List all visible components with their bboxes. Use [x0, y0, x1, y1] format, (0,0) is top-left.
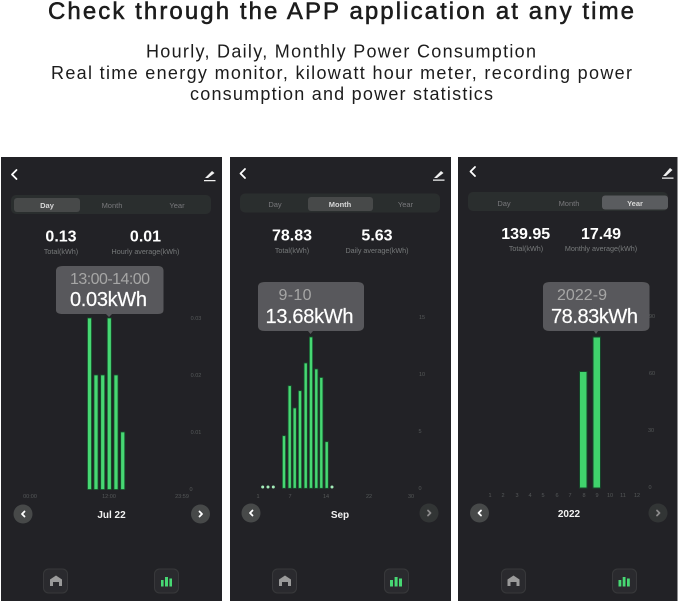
subtitle text [51, 42, 632, 104]
tab bar [468, 192, 668, 211]
stat: daily average [345, 228, 409, 255]
bar chart: hourly [88, 318, 125, 490]
icon: statistics button [384, 569, 408, 593]
x axis labels: 5 [541, 493, 545, 499]
stat: total [44, 228, 78, 256]
tooltip: 13.68kWh [266, 306, 354, 328]
stat: monthly average [565, 226, 637, 253]
y axis labels: 90 [649, 314, 655, 320]
stat: total: Total(kWh) [44, 247, 78, 256]
x axis labels [488, 493, 640, 499]
date navigator: Sep [331, 510, 349, 521]
icon: home button [272, 569, 296, 593]
tab bar: Month [559, 199, 579, 208]
tab bar [11, 195, 211, 214]
icon: edit pencil [662, 168, 674, 179]
date navigator [470, 504, 668, 522]
x axis labels: 3 [515, 493, 519, 499]
tab bar: Day [40, 201, 55, 210]
date navigator: Jul 22 [97, 510, 126, 521]
tooltip [258, 282, 364, 334]
stat: total: 0.13 [45, 228, 77, 246]
y axis labels: 0 [418, 486, 422, 492]
tab bar [240, 194, 440, 212]
x axis labels: 2 [501, 493, 505, 499]
stat: hourly average [112, 228, 179, 256]
stat: monthly average: Monthly average(kWh) [565, 244, 637, 253]
stat: hourly average: 0.01 [130, 228, 161, 246]
stat: total: 78.83 [272, 228, 312, 244]
tab bar: Year [627, 199, 643, 208]
y axis labels [418, 315, 425, 492]
stat: hourly average: Hourly average(kWh) [112, 247, 179, 256]
x axis labels: 7 [288, 494, 292, 500]
x axis labels: 23:59 [175, 494, 189, 500]
y axis labels: 60 [649, 371, 655, 377]
icon: back chevron [12, 170, 16, 179]
tooltip: 2022-9 [557, 287, 607, 304]
tooltip [56, 266, 164, 317]
x axis labels: 12:00 [102, 494, 116, 500]
tooltip: 9-10 [278, 287, 312, 304]
x axis labels: 7 [568, 493, 572, 499]
icon: edit pencil [204, 171, 216, 181]
x axis labels [256, 494, 414, 500]
panel: month view [230, 157, 451, 601]
bar chart: monthly [580, 337, 600, 488]
y axis labels: 0 [189, 487, 193, 493]
tab bar: Year [169, 201, 185, 210]
panel: year view [458, 157, 678, 601]
x axis labels: 12 [634, 493, 640, 499]
y axis labels: 5 [418, 429, 422, 435]
panel: day view [1, 157, 222, 601]
x axis labels: 22 [366, 494, 372, 500]
stat: daily average: 5.63 [361, 228, 393, 244]
y axis labels: 10 [419, 372, 425, 378]
y axis labels: 15 [419, 315, 425, 321]
y axis labels: 0 [648, 485, 652, 491]
x axis labels: 9 [595, 493, 599, 499]
x axis labels: 00:00 [23, 494, 37, 500]
x axis labels: 1 [256, 494, 260, 500]
x axis labels: 6 [555, 493, 559, 499]
x axis labels: 11 [620, 493, 626, 499]
x axis labels: 14 [323, 494, 329, 500]
x axis labels: 4 [528, 493, 532, 499]
stat: total: 139.95 [501, 226, 550, 243]
icon: statistics button [154, 569, 178, 593]
x axis labels: 1 [488, 493, 492, 499]
icon: edit pencil [433, 171, 444, 181]
stat: total [501, 226, 550, 253]
x axis labels: 8 [582, 493, 586, 499]
tooltip: 13:00-14:00 [70, 271, 150, 288]
x axis labels [23, 494, 189, 500]
tab bar: Month [329, 200, 352, 209]
bar chart: daily [261, 337, 334, 488]
y axis labels [648, 314, 655, 491]
x axis labels: 10 [607, 493, 613, 499]
tooltip [543, 282, 650, 334]
icon: home button [502, 569, 526, 593]
y axis labels: 30 [648, 428, 654, 434]
y axis labels [189, 316, 201, 493]
stat: total: Total(kWh) [275, 246, 309, 255]
subtitle text: Hourly, Daily, Monthly Power Consumption [146, 42, 536, 62]
stat: total [272, 228, 312, 255]
icon: home button [44, 569, 68, 593]
stat: daily average: Daily average(kWh) [345, 246, 409, 255]
date navigator [14, 504, 210, 524]
tab bar: Month [102, 201, 122, 210]
y axis labels: 0.01 [191, 430, 201, 436]
stat: total: Total(kWh) [509, 244, 543, 253]
icon: back chevron [240, 169, 245, 178]
y axis labels: 0.03 [191, 316, 201, 322]
date navigator [242, 504, 438, 522]
stat: monthly average: 17.49 [581, 226, 621, 243]
icon: back chevron [470, 167, 475, 176]
y axis labels: 0.02 [191, 373, 201, 379]
tab bar: Day [268, 200, 282, 209]
date navigator: 2022 [558, 509, 581, 520]
tab bar: Year [398, 200, 414, 209]
tooltip: 0.03kWh [70, 289, 147, 311]
x axis labels: 30 [408, 494, 414, 500]
tooltip: 78.83kWh [551, 306, 638, 328]
subtitle text: Real time energy monitor, kilowatt hour meter, recording power [51, 63, 632, 83]
subtitle text: consumption and power statistics [190, 84, 493, 104]
icon: statistics button [612, 569, 636, 593]
tab bar: Day [497, 199, 511, 208]
